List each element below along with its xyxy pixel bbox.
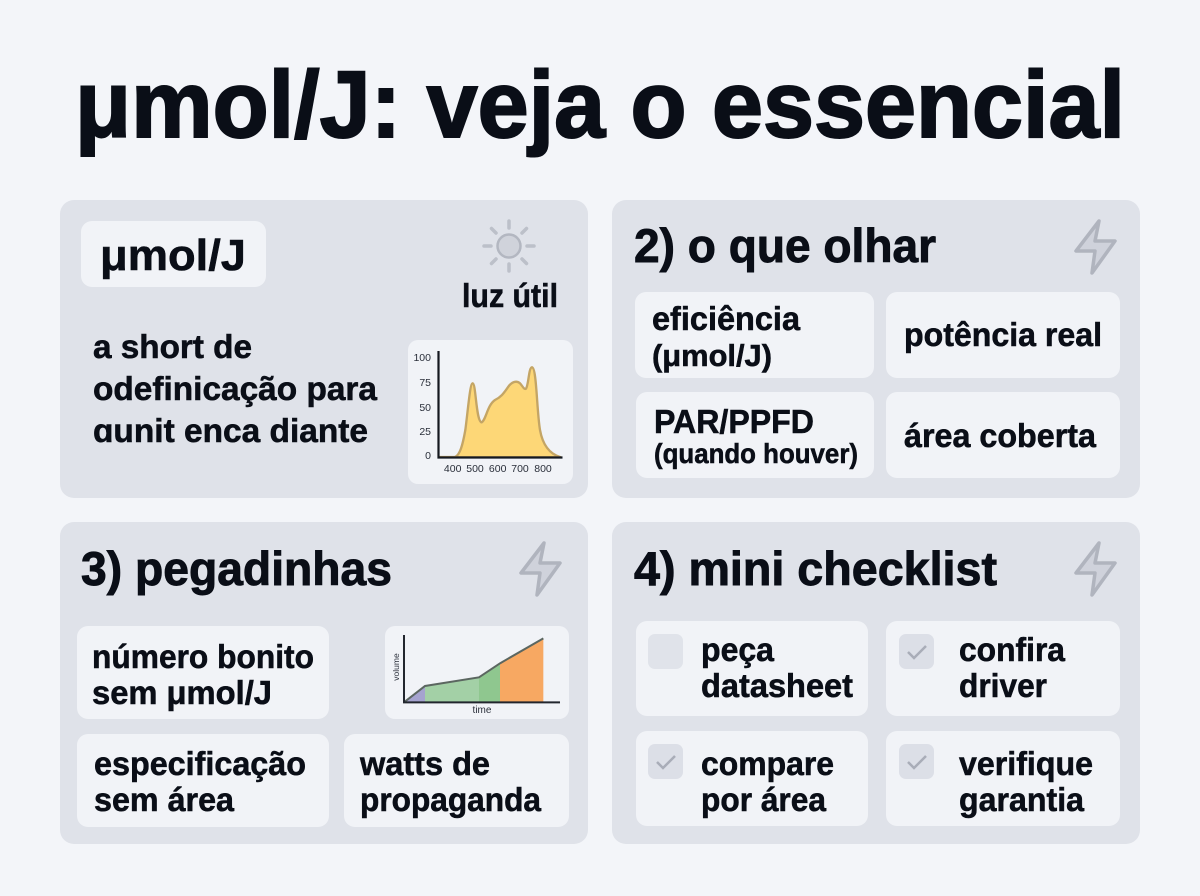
heading: 3) pegadinhas	[81, 542, 392, 595]
y axis labels: 100	[413, 352, 431, 364]
panel: o que olhar	[612, 200, 1140, 498]
card: potência real: potência real	[904, 316, 1102, 353]
spectrum chart	[408, 340, 573, 484]
x axis labels: 500	[466, 463, 484, 475]
item: compare por área: por área	[701, 781, 827, 818]
x axis label: time	[473, 705, 492, 716]
axes	[438, 351, 562, 458]
card: número bonito	[77, 626, 329, 719]
x axis labels: 700	[511, 463, 529, 475]
card: especificação: especificação	[94, 745, 306, 782]
panel: pegadinhas	[60, 522, 588, 844]
x axis labels	[444, 463, 552, 475]
heading: 4) mini checklist	[634, 542, 997, 595]
card: PAR/PPFD	[636, 392, 874, 478]
item: confira driver: driver	[959, 667, 1047, 704]
unit chip	[81, 221, 266, 287]
y axis labels: 0	[425, 450, 431, 462]
panel background	[60, 522, 588, 844]
item: verifique garantia: garantia	[959, 781, 1085, 818]
item: peça datasheet	[636, 621, 868, 716]
x axis labels: 800	[534, 463, 552, 475]
y axis labels	[413, 352, 431, 462]
label: luz útil: luz útil	[462, 277, 558, 314]
y axis label: volume	[391, 653, 401, 681]
icon: sun	[484, 221, 534, 271]
card: eficiência: eficiência	[652, 300, 801, 337]
panel background	[60, 200, 588, 498]
y axis labels: 50	[419, 402, 431, 414]
item: compare por área: compare	[701, 745, 834, 782]
card: especificação: sem área	[94, 781, 235, 818]
panel: definition	[60, 200, 588, 498]
card: potência real	[886, 292, 1120, 378]
item: verifique garantia	[886, 731, 1120, 826]
card: número bonito: sem μmol/J	[92, 674, 272, 711]
item: verifique garantia: verifique	[959, 745, 1093, 782]
card: watts de propaganda: watts de	[359, 745, 490, 782]
spectrum curve	[439, 367, 560, 457]
panel background	[612, 522, 1140, 844]
icon: bolt	[521, 543, 560, 595]
definition text: odefinicação para	[93, 370, 378, 407]
icon: bolt	[1076, 221, 1115, 273]
definition text	[93, 328, 378, 449]
colored area segments	[404, 635, 560, 702]
card: área coberta	[886, 392, 1120, 478]
y axis labels: 75	[419, 377, 431, 389]
card: área coberta: área coberta	[904, 417, 1097, 454]
item: peça datasheet: datasheet	[701, 667, 853, 704]
item: confira driver	[886, 621, 1120, 716]
panel: mini checklist	[612, 522, 1140, 844]
x axis labels: 400	[444, 463, 462, 475]
item: compare por área	[636, 731, 868, 826]
title: μmol/J: veja o essencial	[75, 52, 1125, 158]
item: peça datasheet: peça	[701, 631, 775, 668]
item: confira driver: confira	[959, 631, 1066, 668]
area chart	[385, 626, 569, 719]
y axis labels: 25	[419, 426, 431, 438]
card: PAR/PPFD: PAR/PPFD	[654, 403, 814, 440]
panel background	[612, 200, 1140, 498]
card: watts de propaganda	[344, 734, 569, 827]
card: número bonito: número bonito	[92, 638, 314, 675]
card: PAR/PPFD: (quando houver)	[654, 438, 858, 469]
card: watts de propaganda: propaganda	[360, 781, 542, 818]
icon: bolt	[1076, 543, 1115, 595]
card: especificação	[77, 734, 329, 827]
heading: 2) o que olhar	[634, 219, 936, 272]
card: eficiência	[635, 292, 874, 378]
card: eficiência: (μmol/J)	[652, 338, 772, 373]
definition text: a short de	[93, 328, 252, 365]
x axis labels: 600	[489, 463, 507, 475]
definition text: ɑunit enca diante	[93, 412, 368, 449]
unit chip: μmol/J	[100, 231, 246, 280]
